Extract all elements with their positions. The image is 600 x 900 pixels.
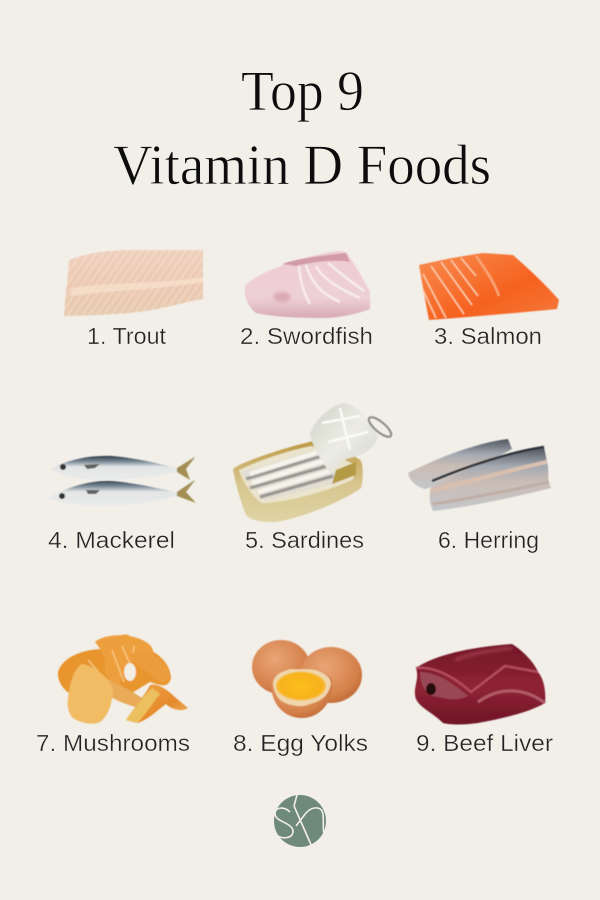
label: 1. Trout: 1. Trout bbox=[87, 323, 166, 349]
label: 5. Sardines: 5. Sardines bbox=[245, 527, 364, 553]
label: 2. Swordfish: 2. Swordfish bbox=[240, 323, 373, 349]
label: 9. Beef Liver: 9. Beef Liver bbox=[416, 730, 553, 756]
label: 8. Egg Yolks: 8. Egg Yolks bbox=[233, 730, 368, 756]
icon: eggs with yolk bbox=[252, 640, 362, 718]
label: 6. Herring: 6. Herring bbox=[438, 527, 539, 553]
icon: swordfish steak bbox=[245, 251, 370, 318]
icon: herring fillets bbox=[408, 439, 551, 511]
label: 4. Mackerel: 4. Mackerel bbox=[48, 527, 175, 553]
icon: salmon fillet bbox=[419, 253, 559, 320]
icon: sardine tin bbox=[233, 403, 394, 522]
icon: mackerel bbox=[48, 456, 196, 506]
icon: chanterelle mushrooms bbox=[58, 635, 188, 724]
title: Vitamin D Foods bbox=[113, 134, 491, 197]
label: 3. Salmon: 3. Salmon bbox=[434, 323, 542, 349]
title bbox=[113, 60, 491, 197]
title: Top 9 bbox=[241, 60, 364, 123]
icon: trout fillet bbox=[64, 250, 203, 316]
icon: logo bbox=[274, 795, 326, 847]
label: 7. Mushrooms: 7. Mushrooms bbox=[36, 730, 190, 756]
icon: beef liver bbox=[415, 644, 545, 724]
